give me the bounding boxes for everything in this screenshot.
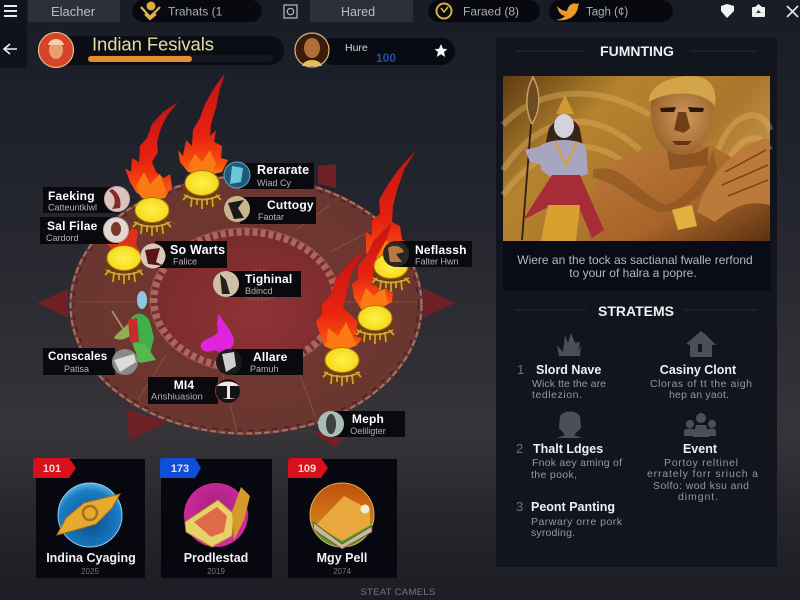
card: Indina Cyaging: Indina Cyaging: [46, 551, 136, 565]
hero illustration: [503, 76, 770, 241]
label: So Warts: So Warts: [170, 243, 225, 257]
label: MI4: [148, 377, 240, 404]
card: Prodlestad: Prodlestad: [184, 551, 248, 565]
label: Allare: [216, 349, 303, 375]
progress header: Indian Fesivals: [38, 32, 284, 68]
avatar: festival hero: [38, 32, 74, 68]
icon: back arrow: [4, 44, 17, 54]
footer caption: STEAT CAMELS: [360, 587, 436, 598]
top navigation bar: [4, 0, 798, 22]
strategy 1: Wick tte the are: [532, 378, 606, 390]
card: Mgy Pell: Mgy Pell: [317, 551, 367, 565]
strategy 3: syroding.: [531, 527, 575, 539]
hero caption: Wiere an the tock as sactianal fwalle rerfond: [517, 253, 753, 267]
strategy 3: Parwary orre pork: [531, 516, 623, 528]
icon: mask: [557, 412, 582, 438]
label: Sal Filae: Sal Filae: [47, 219, 98, 233]
icon: menu: [4, 6, 17, 16]
flame 5: [352, 222, 394, 310]
magenta spirit flame: [201, 314, 234, 352]
label: Rerarate: [224, 162, 314, 189]
card: Prodlestad: [160, 458, 272, 578]
label: Neflassh: [383, 241, 472, 267]
strategy: Event: Solfo: wod ksu and: [653, 480, 749, 492]
title: Indian Fesivals: [92, 34, 214, 54]
cauldron 5: [354, 306, 396, 345]
label: So Warts: Falice: [173, 256, 197, 266]
strategy: Event: errately forr sriuch a: [647, 468, 758, 480]
label: MI4: Anshiuasion: [151, 392, 203, 402]
festival map: [37, 73, 472, 448]
strategy 2: [516, 441, 622, 481]
card: Indina Cyaging: [33, 458, 145, 578]
player badge: Hure: [295, 33, 455, 67]
label: Allare: Allare: [253, 350, 288, 364]
icon: house: [686, 331, 716, 357]
icon: group: [684, 413, 716, 437]
label: Tighinal: [213, 271, 301, 297]
card: Prodlestad: 2019: [207, 567, 225, 576]
flame embers: [136, 150, 402, 352]
strategy 1: Slord Nave: [536, 363, 601, 377]
avatar: player: [295, 33, 329, 67]
green deity figure: [112, 291, 156, 363]
label: Conscales: Conscales: [48, 351, 107, 363]
label: Conscales: Patisa: [64, 364, 89, 374]
label: Allare: Pamuh: [250, 364, 279, 374]
strategy 1: tedlezion.: [532, 389, 582, 401]
tab: Hared: Hared: [341, 5, 375, 19]
hero caption: to your of halra a popre.: [569, 266, 697, 280]
strategy: Casiny Clont: Cloras of tt the aigh: [650, 378, 752, 390]
strategy 2: the pook,: [531, 469, 577, 481]
label: Cuttogy: Faotar: [258, 212, 284, 222]
pill: Trahats: Trahats (1: [168, 4, 223, 18]
player score: 100: [376, 51, 396, 65]
flame 3: [106, 224, 140, 256]
badge: 109: [298, 463, 316, 475]
label: Conscales: [43, 348, 138, 375]
icon: close: [787, 6, 798, 17]
label: Meph: Meph: [352, 412, 384, 426]
strategy 1: 1: [517, 362, 524, 377]
label: Tighinal: Bdincd: [245, 286, 273, 296]
flame 6: [316, 249, 368, 352]
tab: Elacher: Elacher: [51, 4, 96, 19]
pill: Faraed: Faraed (8): [463, 4, 519, 18]
cauldron 2: [131, 198, 173, 237]
cauldron 1: [181, 170, 223, 210]
pill: Trahats: [132, 0, 262, 22]
flame 1: [178, 73, 228, 176]
label: Faeking: Catteuntkiwl: [48, 202, 97, 212]
pill: Faraed: [428, 0, 540, 22]
label: Sal Filae: Cardord: [46, 233, 79, 243]
icon: festive book: [184, 483, 250, 547]
strategy: Casiny Clont: hep an yaot.: [669, 389, 729, 401]
label: Rerarate: Rerarate: [257, 163, 309, 177]
heading: Fumnting: FUMNTING: [600, 43, 674, 59]
player name: Hure: [345, 42, 368, 54]
badge: 101: [43, 463, 61, 475]
panel: right sidebar: [496, 38, 777, 567]
label: Rerarate: Wiad Cy: [257, 178, 292, 188]
man portrait: [588, 76, 770, 241]
tab: Hared: [310, 0, 413, 22]
strategy 3: [516, 499, 623, 539]
warrior deity figure: [522, 77, 604, 241]
pill: Tagh: [549, 0, 673, 22]
label: Sal Filae: [40, 217, 128, 244]
label: Meph: [318, 411, 405, 437]
icon: star: [434, 44, 448, 57]
card: Mgy Pell: [288, 458, 397, 578]
badge: 173: [171, 463, 189, 475]
progress bar: [88, 55, 273, 62]
label: Faeking: [43, 186, 130, 213]
strategy: Event: Event: [683, 442, 718, 456]
cauldron 6: [321, 348, 363, 387]
icon: open book: [310, 483, 374, 549]
strategy 3: Peont Panting: [531, 500, 615, 514]
label: Cuttogy: [224, 196, 316, 224]
strategy 2: 2: [516, 441, 523, 456]
heading: Stratems: STRATEMS: [598, 303, 674, 319]
strategy 1: [517, 362, 606, 401]
icon: golden amulet: [57, 483, 122, 547]
hero caption: [503, 241, 770, 291]
label: Cuttogy: Cuttogy: [267, 198, 314, 212]
strategy: Casiny Clont: Casiny Clont: [660, 363, 737, 377]
label: Neflassh: Neflassh: [415, 243, 467, 257]
strategy 2: Fnok aey aming of: [532, 457, 622, 469]
label: Faeking: Faeking: [48, 189, 95, 203]
label: Tighinal: Tighinal: [245, 272, 292, 286]
outer ring: [69, 175, 423, 435]
card: Indina Cyaging: 2025: [81, 567, 99, 576]
strategy 3: 3: [516, 499, 523, 514]
label: MI4: MI4: [174, 378, 194, 392]
inner circle: [150, 228, 340, 372]
strategy: Event: [647, 442, 758, 503]
flame 2: [125, 102, 178, 200]
flame 4: [366, 150, 416, 268]
label: Neflassh: Falter Hwn: [415, 256, 459, 266]
cauldron 4: [370, 254, 412, 293]
icon: diamond: [721, 4, 734, 18]
strategy: Event: dimgnt.: [678, 491, 718, 503]
icon: crown: [557, 333, 581, 356]
icon: square badge: [284, 5, 297, 18]
icon: camera house: [752, 4, 765, 17]
map corner points: [37, 164, 455, 448]
label: Meph: Oeliligter: [350, 426, 386, 436]
tab: Elacher: [28, 0, 120, 22]
card: Mgy Pell: 2074: [333, 567, 351, 576]
label: So Warts: [140, 241, 227, 268]
strategy: Casiny Clont: [650, 363, 752, 401]
strategy 2: Thalt Ldges: [533, 442, 603, 456]
pill: Tagh: Tagh (¢): [586, 6, 628, 18]
cauldron 3: [103, 246, 145, 285]
strategy: Event: Portoy reltinel: [664, 457, 738, 469]
